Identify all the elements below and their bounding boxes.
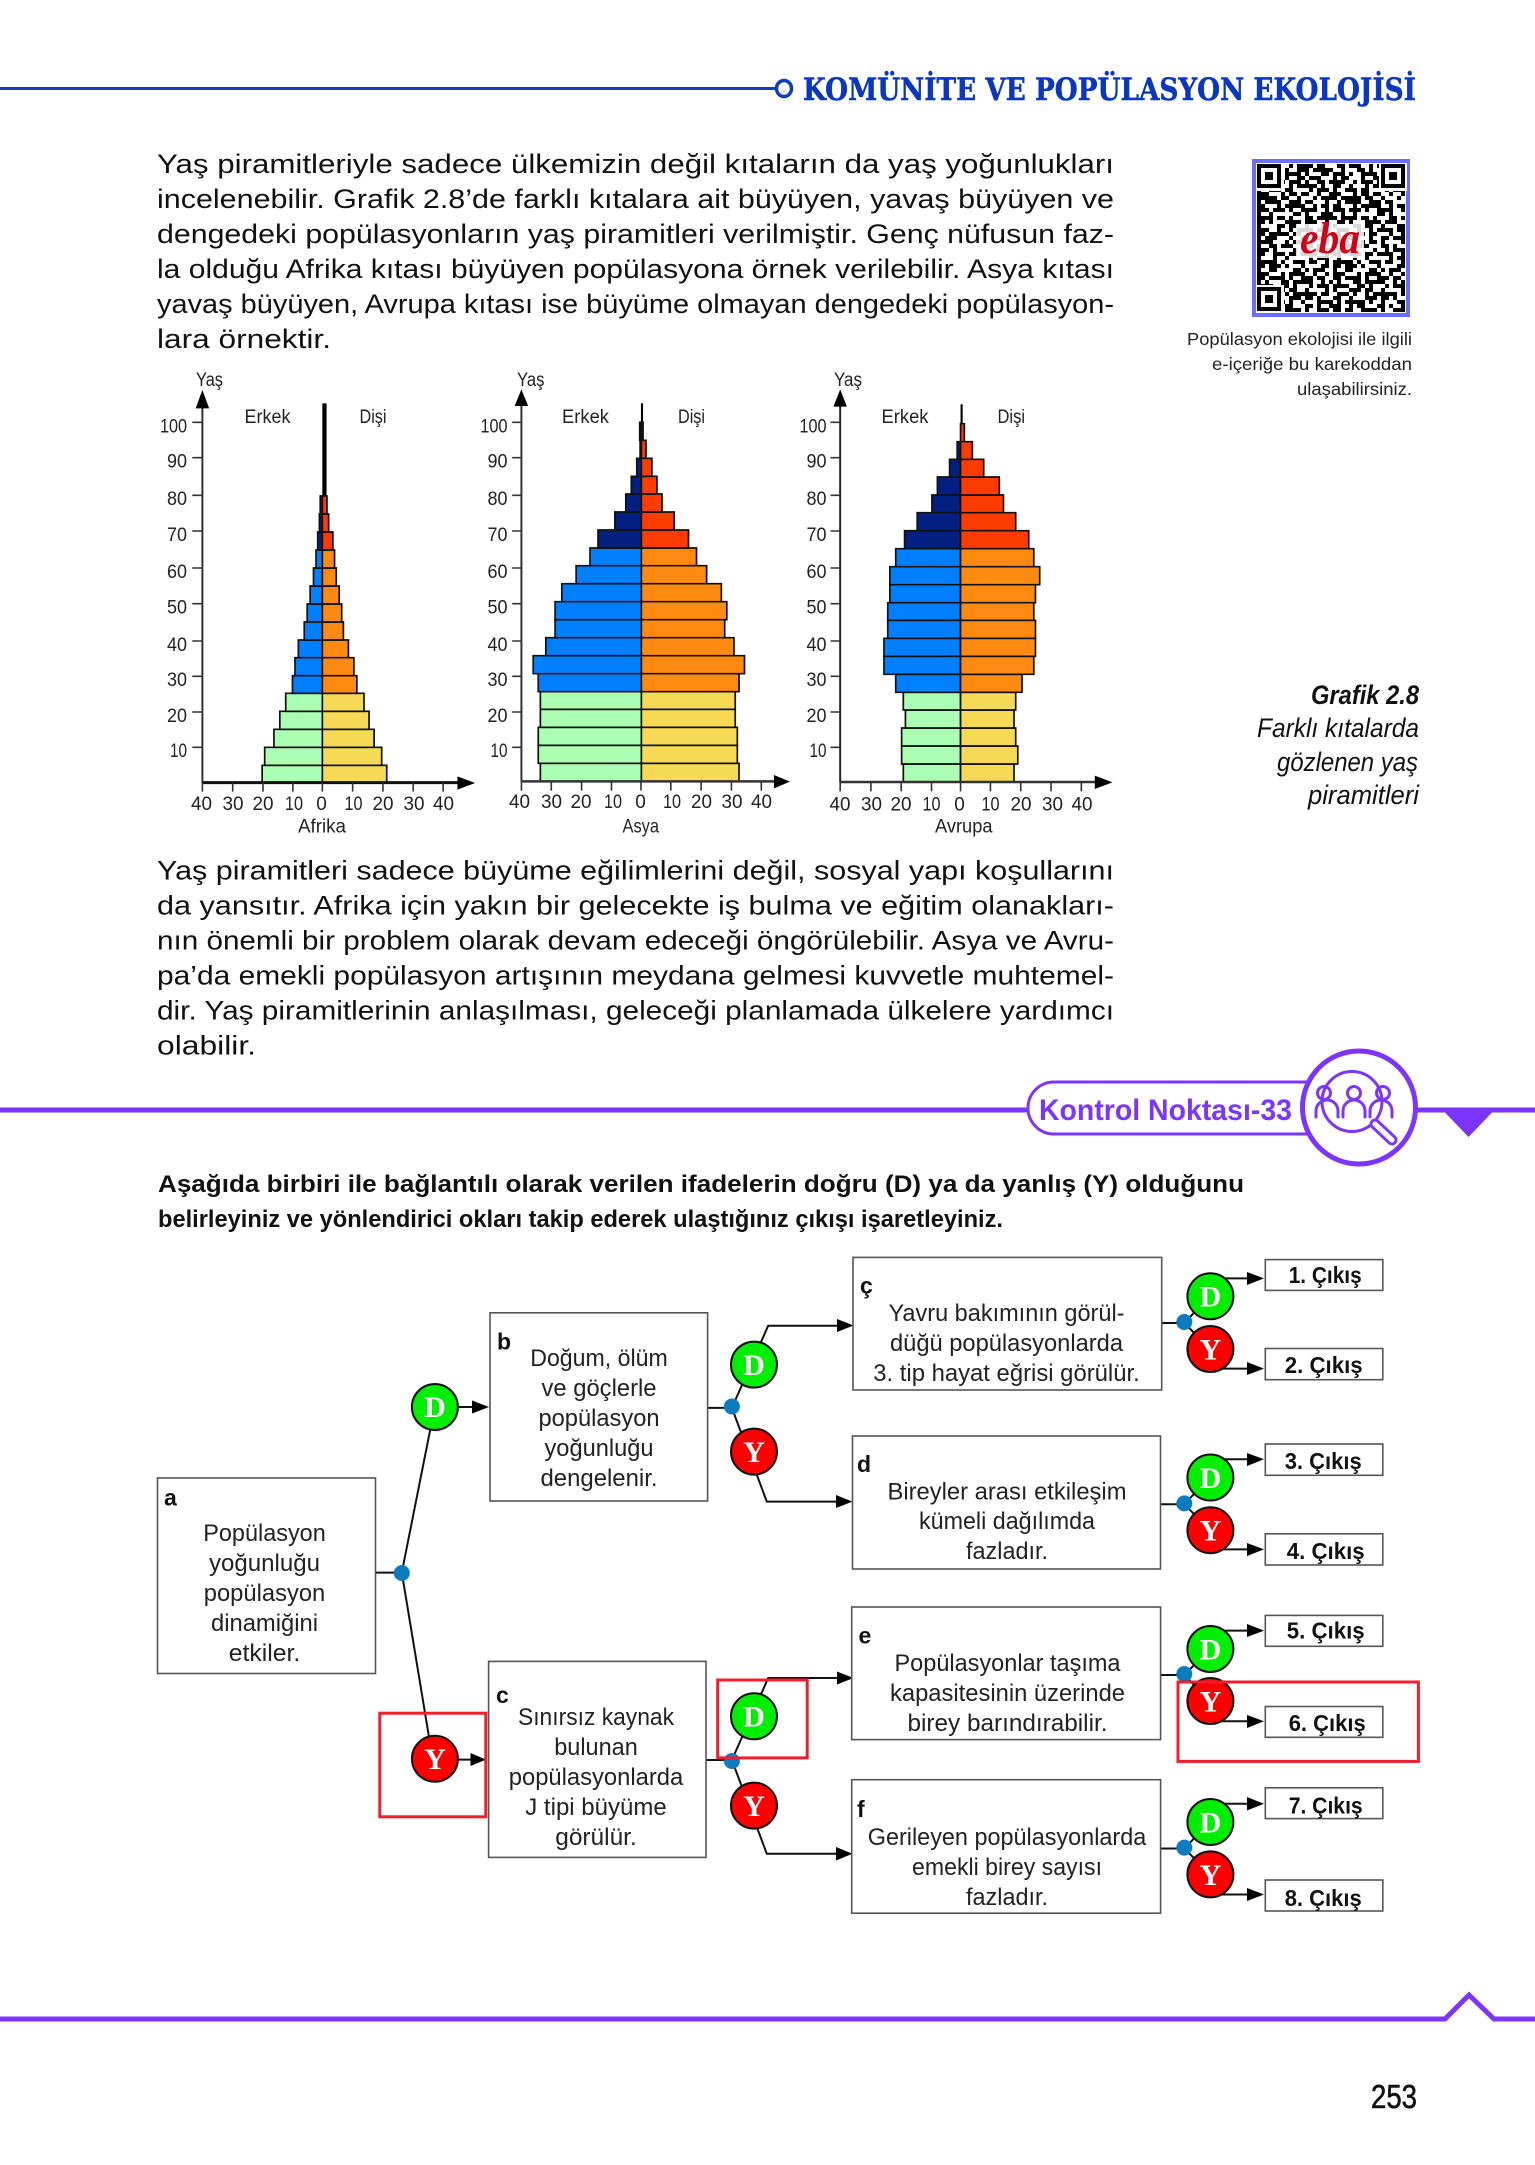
Asya labels: Asya bbox=[622, 816, 659, 838]
chart: Avrupa population pyramid bbox=[800, 370, 1112, 838]
outcome boxes: Çıkış 1 to 8: 2. Çıkış bbox=[1285, 1352, 1363, 1378]
box c: popülasyonlarda bbox=[509, 1764, 684, 1791]
Asya labels: 40 bbox=[751, 792, 772, 813]
Afrika labels: 40 bbox=[167, 635, 187, 656]
text block: intro paragraph: la olduğu Afrika kıtası büyüyen popülasyona örnek verilebilir. Asya kıtası bbox=[157, 254, 1114, 284]
Afrika labels: 80 bbox=[167, 489, 187, 510]
Avrupa labels: 40 bbox=[830, 794, 850, 816]
Asya labels: 10 bbox=[490, 741, 508, 762]
Avrupa labels: 40 bbox=[1072, 794, 1092, 816]
text block: second paragraph: pa’da emekli popülasyon artışının meydana gelmesi kuvvetle muhtemel- bbox=[157, 960, 1114, 990]
text block: second paragraph: nın önemli bir problem olarak devam edeceği öngörülebilir. Asya ve Avru- bbox=[157, 926, 1114, 956]
text block: intro paragraph: yavaş büyüyen, Avrupa kıtası ise büyüme olmayan dengedeki popülasyon- bbox=[157, 289, 1114, 319]
chart: Afrika population pyramid bbox=[160, 370, 475, 838]
Avrupa labels: 90 bbox=[806, 452, 826, 472]
outcome boxes: Çıkış 1 to 8: 6. Çıkış bbox=[1289, 1710, 1366, 1736]
box d: kümeli dağılımda bbox=[919, 1508, 1096, 1535]
text block: second paragraph: olabilir. bbox=[157, 1030, 256, 1060]
Avrupa labels: Dişi bbox=[998, 407, 1025, 428]
Avrupa bars and axes bbox=[831, 389, 1112, 791]
decision dots and D/Y nodes, right column: Y bbox=[1200, 1514, 1222, 1548]
Afrika labels: 10 bbox=[170, 741, 187, 762]
Afrika labels: 30 bbox=[167, 670, 187, 691]
box c: görülür. bbox=[555, 1824, 637, 1851]
decision dots and D/Y nodes, left columns: Y bbox=[424, 1743, 446, 1776]
decision dots and D/Y nodes, right column: Y bbox=[1200, 1859, 1222, 1892]
instruction text bbox=[158, 1171, 1244, 1233]
chart: Asya population pyramid bbox=[480, 370, 790, 838]
decision dots and D/Y nodes, left columns: D bbox=[424, 1391, 446, 1424]
text block: second paragraph bbox=[157, 856, 1114, 1060]
Asya labels: 40 bbox=[509, 792, 530, 813]
Afrika labels: Dişi bbox=[360, 407, 386, 428]
Asya labels bbox=[480, 370, 772, 838]
decision dots and D/Y nodes, right column: Y bbox=[1200, 1686, 1222, 1718]
Avrupa labels: 20 bbox=[1010, 794, 1032, 816]
decision dots and D/Y nodes, left columns: Y bbox=[743, 1790, 765, 1823]
Avrupa labels: 10 bbox=[922, 794, 940, 816]
box e: kapasitesinin üzerinde bbox=[890, 1680, 1125, 1707]
box ç: Yavru bakımının görül- bbox=[888, 1300, 1124, 1327]
decision dots and D/Y nodes, left columns bbox=[394, 1342, 777, 1829]
Asya labels: 80 bbox=[488, 489, 508, 510]
box d: Bireyler arası etkileşim bbox=[888, 1478, 1126, 1506]
Afrika labels: 20 bbox=[252, 794, 274, 815]
box ç: 3. tip hayat eğrisi görülür. bbox=[873, 1360, 1140, 1387]
box a: Popülasyon bbox=[203, 1520, 326, 1547]
decision dots and D/Y nodes, right column: D bbox=[1200, 1462, 1221, 1495]
Afrika labels: 30 bbox=[404, 794, 424, 815]
Afrika labels: Afrika bbox=[298, 816, 346, 838]
box a: dinamiğini bbox=[211, 1610, 318, 1637]
Avrupa labels: 0 bbox=[954, 794, 965, 816]
Asya labels: 30 bbox=[488, 670, 508, 691]
box f: fazladır. bbox=[966, 1884, 1048, 1911]
outcome boxes: Çıkış 1 to 8: 5. Çıkış bbox=[1287, 1618, 1365, 1644]
decision dots and D/Y nodes, right column: D bbox=[1200, 1634, 1221, 1666]
Avrupa labels: 10 bbox=[810, 741, 826, 762]
outcome boxes: Çıkış 1 to 8: 7. Çıkış bbox=[1289, 1793, 1363, 1819]
box c bbox=[489, 1661, 706, 1857]
red answer highlights bbox=[380, 1680, 1418, 1817]
graph caption: Grafik 2.8: Farklı kıtalarda bbox=[1257, 713, 1419, 743]
box c: c bbox=[496, 1682, 509, 1708]
Afrika labels: 100 bbox=[160, 416, 187, 438]
box e: birey barındırabilir. bbox=[908, 1710, 1108, 1737]
Afrika labels: 40 bbox=[433, 794, 454, 815]
box d bbox=[852, 1436, 1160, 1569]
section banner: Kontrol Noktası-33 bbox=[0, 1051, 1535, 1164]
Avrupa labels: Erkek bbox=[882, 407, 929, 428]
decision dots and D/Y nodes, right column: Y bbox=[1200, 1334, 1222, 1366]
box e: Popülasyonlar taşıma bbox=[894, 1650, 1121, 1677]
text block: intro paragraph: lara örnektir. bbox=[157, 324, 331, 354]
icon: magnifier over people bbox=[1302, 1051, 1416, 1164]
Afrika labels: 10 bbox=[285, 794, 303, 815]
Avrupa labels: 80 bbox=[806, 489, 826, 510]
Asya labels: 20 bbox=[691, 792, 712, 813]
box ç: düğü popülasyonlarda bbox=[890, 1330, 1124, 1357]
Afrika labels: Yaş bbox=[196, 370, 223, 391]
Avrupa labels: 20 bbox=[806, 706, 826, 727]
Avrupa labels: 70 bbox=[806, 525, 826, 546]
decision dots and D/Y nodes, left columns: Y bbox=[743, 1436, 765, 1469]
text block: intro paragraph bbox=[157, 149, 1114, 354]
Avrupa labels: 10 bbox=[982, 794, 1000, 816]
text block: second paragraph: da yansıtır. Afrika için yakın bir gelecekte iş bulma ve eğitim olanakları- bbox=[157, 890, 1114, 920]
box f: emekli birey sayısı bbox=[912, 1854, 1102, 1881]
box f: Gerileyen popülasyonlarda bbox=[868, 1824, 1147, 1851]
Afrika labels: 60 bbox=[167, 562, 187, 583]
box e: e bbox=[858, 1622, 871, 1648]
Avrupa labels: 40 bbox=[806, 635, 826, 656]
text block: intro paragraph: Yaş piramitleriyle sadece ülkemizin değil kıtaların da yaş yoğunlukları bbox=[157, 149, 1114, 179]
outcome boxes: Çıkış 1 to 8: 3. Çıkış bbox=[1285, 1448, 1362, 1474]
box c: Sınırsız kaynak bbox=[518, 1704, 675, 1731]
graph caption: Grafik 2.8: gözlenen yaş bbox=[1277, 747, 1418, 777]
Asya labels: 10 bbox=[663, 792, 681, 813]
box b: Doğum, ölüm bbox=[530, 1345, 668, 1372]
QR caption bbox=[1187, 329, 1412, 399]
Asya labels: 30 bbox=[722, 792, 742, 813]
Asya labels: 100 bbox=[480, 416, 508, 438]
decision dots and D/Y nodes, right column bbox=[1176, 1273, 1233, 1897]
section banner: Kontrol Noktası-33: Kontrol Noktası-33 bbox=[1039, 1094, 1292, 1127]
box e bbox=[852, 1607, 1161, 1740]
Avrupa labels: 30 bbox=[806, 670, 826, 691]
outcome boxes: Çıkış 1 to 8: 4. Çıkış bbox=[1287, 1538, 1365, 1564]
box a: yoğunluğu bbox=[209, 1550, 320, 1577]
box b: popülasyon bbox=[538, 1405, 660, 1432]
Asya labels: 40 bbox=[488, 635, 508, 656]
decision dots and D/Y nodes, right column: D bbox=[1200, 1806, 1221, 1840]
Asya labels: 60 bbox=[488, 562, 508, 583]
box f bbox=[852, 1780, 1161, 1913]
text block: intro paragraph: incelenebilir. Grafik 2.8’de farklı kıtalara ait büyüyen, yavaş büyüyen ve bbox=[157, 184, 1114, 214]
Avrupa labels: 30 bbox=[861, 794, 882, 816]
Avrupa labels: 30 bbox=[1042, 794, 1063, 816]
QR code with eba mark: eba bbox=[1300, 214, 1360, 263]
Asya labels: Dişi bbox=[678, 407, 705, 428]
text block: second paragraph: Yaş piramitleri sadece büyüme eğilimlerini değil, sosyal yapı koşullarını bbox=[157, 856, 1114, 886]
Asya labels: 30 bbox=[541, 792, 562, 813]
box b: ve göçlerle bbox=[542, 1375, 656, 1402]
header: chapter title with rule: KOMÜNİTE VE POPÜLASYON EKOLOJİSİ bbox=[803, 69, 1416, 108]
box c: bulunan bbox=[554, 1734, 638, 1761]
outcome boxes: Çıkış 1 to 8 bbox=[1265, 1260, 1383, 1911]
Asya labels: Erkek bbox=[562, 407, 609, 428]
QR code with eba mark bbox=[1254, 161, 1408, 315]
Avrupa labels bbox=[800, 370, 1092, 838]
Afrika labels: 30 bbox=[222, 794, 244, 815]
footer rule with peak bbox=[0, 1995, 1535, 2019]
Avrupa labels: 50 bbox=[806, 598, 826, 618]
Afrika labels: 10 bbox=[344, 794, 362, 815]
instruction text: belirleyiniz ve yönlendirici okları takip ederek ulaştığınız çıkışı işaretleyiniz. bbox=[158, 1206, 1003, 1233]
Afrika bars and axes bbox=[192, 390, 475, 792]
Asya labels: 0 bbox=[635, 792, 646, 813]
box a: a bbox=[164, 1484, 177, 1510]
flowchart connectors bbox=[376, 1272, 1264, 1901]
graph caption: Grafik 2.8 bbox=[1257, 680, 1420, 810]
Asya bars and axes bbox=[512, 389, 790, 791]
Afrika labels: 40 bbox=[191, 794, 212, 815]
text block: intro paragraph: dengedeki popülasyonların yaş piramitleri verilmiştir. Genç nüfusun faz- bbox=[157, 219, 1114, 249]
Avrupa labels: 20 bbox=[890, 794, 912, 816]
Asya labels: 10 bbox=[604, 792, 622, 813]
box a bbox=[158, 1478, 376, 1674]
Avrupa labels: Yaş bbox=[834, 370, 862, 391]
Avrupa labels: 60 bbox=[806, 562, 826, 583]
Avrupa labels: 100 bbox=[800, 416, 826, 438]
Avrupa labels: Avrupa bbox=[935, 816, 993, 838]
Asya labels: 20 bbox=[570, 792, 592, 813]
Afrika labels: 70 bbox=[167, 525, 187, 546]
box ç bbox=[853, 1257, 1162, 1390]
decision dots and D/Y nodes, left columns: D bbox=[743, 1700, 765, 1734]
Afrika labels: Erkek bbox=[244, 407, 291, 428]
page number: 253 bbox=[1371, 2078, 1417, 2115]
box b: dengelenir. bbox=[540, 1465, 658, 1492]
Asya labels: 90 bbox=[488, 452, 508, 472]
Afrika labels bbox=[160, 370, 454, 838]
box a: etkiler. bbox=[229, 1640, 300, 1667]
decision dots and D/Y nodes, right column: D bbox=[1200, 1280, 1221, 1314]
Afrika labels: 90 bbox=[167, 452, 187, 472]
box b: yoğunluğu bbox=[544, 1435, 654, 1462]
box d: d bbox=[857, 1451, 871, 1477]
outcome boxes: Çıkış 1 to 8: 1. Çıkış bbox=[1289, 1262, 1362, 1288]
box ç: ç bbox=[860, 1272, 873, 1298]
graph caption: Grafik 2.8: Grafik 2.8 bbox=[1311, 680, 1419, 710]
QR caption: ulaşabilirsiniz. bbox=[1297, 379, 1412, 399]
Asya labels: 70 bbox=[488, 525, 508, 546]
decision dots and D/Y nodes, left columns: D bbox=[743, 1349, 765, 1382]
box c: J tipi büyüme bbox=[525, 1794, 667, 1821]
QR caption: Popülasyon ekolojisi ile ilgili bbox=[1187, 329, 1412, 349]
outcome boxes: Çıkış 1 to 8: 8. Çıkış bbox=[1285, 1885, 1362, 1911]
Asya labels: Yaş bbox=[517, 370, 544, 391]
box b: b bbox=[497, 1328, 511, 1354]
Asya labels: 20 bbox=[488, 706, 508, 727]
box f: f bbox=[857, 1796, 865, 1822]
box b bbox=[490, 1313, 708, 1501]
graph caption: Grafik 2.8: piramitleri bbox=[1307, 780, 1420, 810]
Afrika labels: 50 bbox=[167, 598, 187, 618]
Asya labels: 50 bbox=[488, 598, 508, 618]
box a: popülasyon bbox=[204, 1580, 325, 1607]
box d: fazladır. bbox=[966, 1538, 1048, 1565]
instruction text: Aşağıda birbiri ile bağlantılı olarak verilen ifadelerin doğru (D) ya da yanlış (Y) olduğunu bbox=[158, 1171, 1244, 1198]
text block: second paragraph: dir. Yaş piramitlerinin anlaşılması, geleceği planlamada ülkelere yardımcı bbox=[157, 996, 1114, 1026]
Afrika labels: 20 bbox=[372, 794, 394, 815]
Afrika labels: 20 bbox=[167, 706, 187, 727]
Afrika labels: 0 bbox=[316, 794, 327, 815]
header: chapter title with rule bbox=[0, 69, 1416, 108]
QR caption: e-içeriğe bu karekoddan bbox=[1212, 354, 1412, 374]
